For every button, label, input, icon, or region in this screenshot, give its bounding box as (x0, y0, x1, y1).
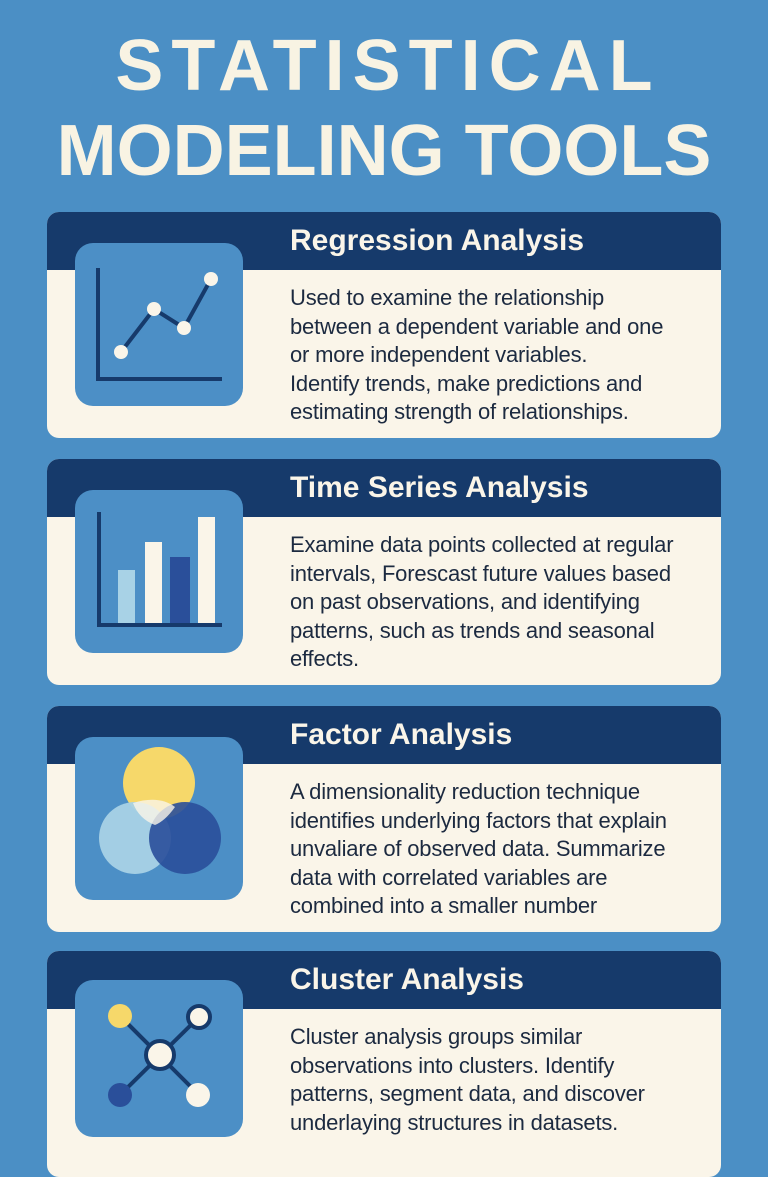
heading: Regression Analysis (290, 224, 584, 257)
text: Cluster analysis groups similar (290, 1024, 582, 1049)
text (290, 1024, 645, 1134)
panel: time series (47, 459, 721, 685)
icon: bar chart (75, 490, 243, 653)
text: Examine data points collected at regular (290, 532, 673, 557)
text: between a dependent variable and one (290, 314, 663, 338)
text: unvaliare of observed data. Summarize (290, 836, 665, 861)
text: identifies underlying factors that explain (290, 808, 667, 832)
panel: factor (47, 706, 721, 932)
icon: line chart (75, 243, 243, 406)
text (290, 285, 663, 424)
title (57, 26, 711, 191)
text (290, 532, 674, 671)
text: intervals, Forescast future values based (290, 560, 671, 586)
title: MODELING TOOLS (57, 111, 711, 191)
text (290, 779, 667, 918)
title: STATISTICAL (115, 26, 661, 106)
text: combined into a smaller number (290, 893, 597, 918)
icon: venn (75, 737, 243, 900)
text: or more independent variables. (290, 342, 587, 367)
panel: regression (47, 212, 721, 438)
text: estimating strength of relationships. (290, 399, 629, 424)
text: Used to examine the relationship (290, 285, 604, 310)
text: Identify trends, make predictions and (290, 370, 642, 396)
heading: Factor Analysis (290, 718, 512, 751)
heading: Cluster Analysis (290, 963, 524, 996)
heading: Time Series Analysis (290, 471, 589, 504)
icon: network (75, 980, 243, 1137)
text: on past observations, and identifying (290, 589, 640, 614)
text: underlaying structures in datasets. (290, 1110, 618, 1134)
panel: cluster (47, 951, 721, 1177)
text: data with correlated variables are (290, 864, 607, 890)
text: patterns, such as trends and seasonal (290, 618, 654, 642)
text: observations into clusters. Identify (290, 1052, 614, 1078)
text: A dimensionality reduction technique (290, 779, 640, 804)
text: effects. (290, 646, 359, 671)
text: patterns, segment data, and discover (290, 1081, 645, 1106)
